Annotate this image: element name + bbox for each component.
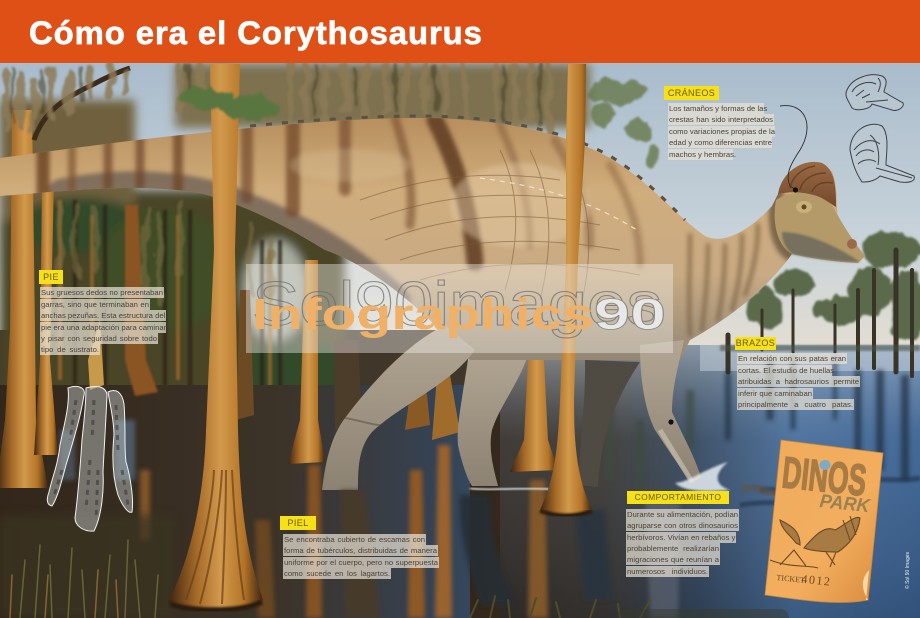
left cypress trees [0, 68, 130, 488]
text: cráneos: edad y como diferencias entre [669, 138, 772, 147]
text: comportamiento: Durante su alimentación, podían [627, 510, 738, 519]
text: brazos: cortas. El estudio de huellas [738, 366, 834, 374]
dinosaur head and crest [775, 162, 865, 263]
water surface around feet and left reflections [60, 420, 920, 618]
text: comportamiento: herbívoros. Vivían en rebaños y [627, 533, 735, 542]
text: brazos: inferir que caminaban [738, 388, 812, 398]
pointer line and dot: crest [780, 106, 807, 193]
green foliage at top right of the canopy [588, 80, 657, 167]
text: cráneos [668, 103, 775, 160]
watermark panel: Infographics [252, 290, 594, 339]
text: comportamiento: agruparse con otros dinosaurios [627, 521, 738, 530]
text: pie: Sus gruesos dedos no presentaban [41, 288, 163, 297]
text: cráneos: Los tamaños y formas de las [669, 104, 767, 113]
near front leg [640, 340, 701, 483]
text: piel: forma de tubérculos, distribuidas de manera [284, 546, 437, 555]
text: cráneos: machos y hembras. [669, 150, 736, 159]
label: cráneos: CRÁNEOS [668, 88, 715, 98]
text: brazos: principalmente a cuatro patas. [738, 400, 853, 409]
label: piel: PIEL [287, 518, 309, 528]
text: pie: anchas pezuñas. Esta estructura del [41, 311, 165, 320]
watermark panel [246, 264, 673, 353]
text: pie [40, 287, 166, 355]
marker dot: arm [668, 419, 674, 425]
note: piel [280, 516, 439, 579]
water [0, 345, 920, 618]
text: cráneos: como variaciones propias de la [669, 127, 775, 136]
text: pie: y pisar con seguridad sobre todo [41, 334, 157, 343]
hanging moss canopy [5, 66, 550, 305]
text: brazos: En relación con sus patas eran [738, 354, 846, 363]
note: pie [39, 270, 166, 355]
text: piel: uniforme por el cuerpo, pero no superpuesta [284, 558, 438, 567]
ticket hole [820, 460, 830, 470]
ticket: Dinos Park: TICKET [776, 573, 805, 585]
ticket: Dinos Park: DINOS [780, 448, 869, 506]
body colour bands [43, 118, 790, 335]
note: brazos [735, 337, 860, 410]
text: piel: Se encontraba cubierto de escamas con [284, 535, 425, 544]
label: pie [39, 270, 63, 284]
background forest on the left [0, 64, 590, 410]
note: comportamiento [626, 491, 739, 577]
sky [0, 63, 920, 363]
water reflections at right [610, 355, 905, 490]
watermark panel: Sol90images [252, 270, 662, 339]
dinosaur body [0, 116, 865, 360]
far legs of the dinosaur [458, 345, 640, 487]
text: comportamiento: probablemente realizarían [627, 544, 719, 553]
text: pie: pie era una adaptación para caminar [41, 322, 166, 332]
near hind leg [322, 325, 475, 490]
text: cráneos: crestas han sido interpretados [669, 115, 773, 124]
background trunks [125, 205, 558, 472]
text: comportamiento: migraciones que reunían a [627, 555, 719, 564]
skull sketch: tall crest [850, 124, 914, 182]
ticket: Dinos Park: PARK [819, 491, 872, 517]
text: brazos [737, 353, 860, 410]
title: Cómo era el Corythosaurus [29, 14, 483, 51]
ticket: Dinos Park: 4012 [801, 572, 832, 589]
foreground cypress trunk right [540, 64, 592, 516]
header band [0, 0, 920, 63]
distant cypress trees at right [720, 232, 920, 376]
dorsal scutes [250, 116, 685, 220]
skull sketch: side profile [846, 75, 903, 110]
label: comportamiento: COMPORTAMIENTO [635, 492, 721, 502]
ticket peeled corner [863, 570, 869, 600]
foreground cypress trunk left [168, 64, 280, 610]
copyright credit: © Sol 90 Images [905, 552, 911, 589]
ticket: Dinos Park [765, 440, 883, 603]
watermark panel: 90 [594, 290, 666, 339]
text: piel: como sucede en los lagartos. [284, 569, 390, 578]
text: comportamiento: numerosos individuos. [627, 566, 708, 576]
text: pie: tipo de sustrato. [41, 345, 99, 354]
text: pie: garras, sino que terminaban en [41, 300, 149, 308]
label: brazos: BRAZOS [736, 338, 775, 348]
text: comportamiento [626, 509, 739, 577]
label: pie: PIE [43, 272, 59, 282]
label: cráneos [664, 86, 719, 100]
note: cráneos [664, 86, 775, 160]
label: comportamiento [627, 491, 729, 504]
text: brazos: atribuidas a hadrosaurios permite [738, 377, 859, 386]
foreground vegetation [0, 486, 780, 618]
label: piel [280, 516, 316, 530]
ticket drawing of dinosaurs [770, 516, 860, 568]
text: piel [283, 534, 439, 579]
foot sketch [47, 386, 133, 531]
